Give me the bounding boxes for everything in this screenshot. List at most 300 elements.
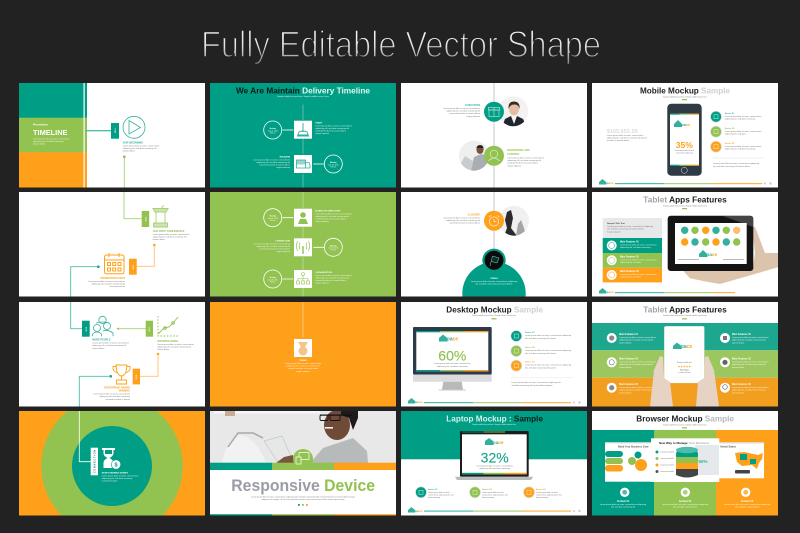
- text: our beginning: [123, 142, 160, 152]
- photo: chess: [499, 205, 529, 236]
- icon: growth chart: [158, 316, 178, 336]
- footer: lipace: [605, 181, 614, 185]
- subtitle: Sample subtitle text put here. Sample subtitle text put here: [663, 204, 707, 207]
- photo: woman: [500, 96, 528, 126]
- series list: Series 01: [525, 332, 535, 334]
- series row: consectetuer adipiscing elit, sed: [428, 494, 453, 496]
- series list: [710, 111, 762, 152]
- series row: consectetuer adipiscing elit, sed: [482, 494, 507, 496]
- icon box: connection: [294, 238, 312, 256]
- hand image: [683, 227, 780, 284]
- series row: Lorem ipsum dolor sit amet: [482, 491, 504, 494]
- text: release: [254, 156, 290, 168]
- right features: [720, 333, 769, 394]
- series list: Lorem ipsum dolor sit amet, consectetuer: [725, 130, 762, 133]
- text: our beginning: adipiscing elit, sed diam nonummy elit: [123, 147, 157, 150]
- icon box: start: [294, 121, 312, 139]
- vertical tag: CONNECTION: [94, 450, 96, 473]
- icon: podium: [153, 206, 168, 227]
- icon: calendar: [104, 253, 124, 274]
- series list: Series 01: [725, 113, 735, 115]
- date circle 2: [324, 238, 342, 256]
- text: closure: CLOSURE: [468, 213, 480, 216]
- series list: Series 03: [725, 143, 735, 145]
- content columns: elit, sed diam nonummy elit: [611, 506, 636, 509]
- note: Lorem ipsum dolor sit amet, consectetuer adipiscing: [713, 162, 759, 165]
- footer: [408, 398, 581, 404]
- text: board: adipiscing elit, sed diam nonummy elit: [315, 215, 349, 218]
- tablet mockup: Sample subtitle text: [677, 361, 692, 364]
- series list: Lorem ipsum dolor sit amet, consectetuer adipiscing: [525, 334, 571, 337]
- panel: laptop mockup: [401, 411, 587, 516]
- text: closure: adipiscing elit, sed diam nonummy elit: [446, 219, 480, 222]
- text: growing more: Lorem ipsum dolor sit amet, consectetuer: [157, 343, 194, 346]
- text: finish: euismod tincidunt ut laoreet dolore: [288, 367, 319, 370]
- series list: elit, sed diam nonummy elit laoreet: [525, 367, 556, 370]
- amount: [607, 129, 647, 142]
- footer: lipace: [414, 400, 423, 404]
- text: release: magna aliquam: [276, 167, 290, 169]
- feature card: adipiscing elit, sed diam: [620, 276, 642, 278]
- text: connection: adipiscing elit, sed diam nonummy elit: [256, 245, 290, 248]
- text: execution: [443, 104, 481, 118]
- connector green: [124, 192, 142, 219]
- text: our beginning: Lorem ipsum dolor sit amet, consectetuer: [123, 144, 160, 148]
- content columns: Lorem ipsum dolor sit amet, consectetuer adipiscing: [724, 503, 770, 506]
- series list: [511, 330, 571, 371]
- left features: adipiscing elit, sed diam nonummy elit: [619, 363, 653, 366]
- centre browser: Lorem ipsum dolor: [660, 457, 674, 460]
- amount: Lorem ipsum dolor sit amet, consectetuer: [607, 134, 644, 137]
- series row: [416, 487, 561, 499]
- text: start: [315, 122, 352, 135]
- heading: We Are Maintain Delivery Timeline: [236, 86, 370, 96]
- right features: Lorem ipsum dolor sit amet, consectetuer: [732, 360, 769, 364]
- series row: consectetuer adipiscing elit, sed: [536, 494, 561, 496]
- text: growing more: adipiscing elit, sed diam nonummy elit: [157, 346, 191, 349]
- text: more people: MORE PEOPLE: [92, 339, 111, 342]
- year tag: [142, 211, 149, 227]
- connector: [79, 411, 91, 462]
- date circle 2: [324, 155, 342, 173]
- text: more people: adipiscing elit, sed diam nonummy elit: [92, 344, 126, 347]
- bottom strip: [210, 514, 396, 516]
- heading: timeline: TIMELINE: [33, 128, 68, 137]
- centre browser: [651, 438, 719, 482]
- text: release: RELEASE: [280, 156, 291, 159]
- left browser: Build Your Business Gear: [618, 446, 649, 448]
- right browser: United States: [720, 446, 737, 448]
- right features: Lorem ipsum dolor sit amet, consectetuer: [732, 386, 769, 389]
- text: monitoring: magna aliquam: [507, 165, 521, 167]
- text: board: Lorem ipsum dolor sit amet, consectetuer: [315, 212, 352, 215]
- text: monitoring: adipiscing elit, sed diam nonummy elit: [507, 159, 541, 162]
- date circle 3: 9:00 am: [270, 281, 276, 283]
- dots: [682, 99, 687, 100]
- text: enterprise award: ENTERPRISE AWARD: [104, 386, 130, 389]
- finish flag node: [482, 249, 506, 272]
- colour blocks: [19, 83, 87, 188]
- subtitle: Sample subtitle text put here. Sample subtitle text put here: [472, 423, 516, 426]
- laptop mockup: adipiscing elit, sed diam nonummy: [479, 467, 510, 470]
- text: connection: [253, 240, 291, 253]
- date circle 1: June 21, 2015: [268, 218, 278, 220]
- left features: adipiscing elit, sed diam nonummy elit: [619, 339, 653, 342]
- footer: [599, 288, 735, 294]
- icon box: organization: [294, 270, 312, 288]
- text: promotion event: PROMOTION EVENT: [101, 277, 125, 280]
- left features: adipiscing elit, sed diam nonummy elit: [619, 389, 653, 392]
- centre browser: Lorem ipsum dolor: [660, 470, 674, 473]
- right features: laoreet dolore: [732, 391, 745, 394]
- text: monitoring: [507, 149, 544, 167]
- date circle 1: 9:00 am: [270, 220, 276, 222]
- icon box: medal: [294, 339, 312, 357]
- text: connection: Lorem ipsum dolor sit amet, consectetuer: [253, 242, 290, 245]
- heading: Tablet Apps Features: [643, 194, 727, 204]
- logo: lipace: [444, 336, 458, 342]
- right features: laoreet dolore: [732, 366, 745, 369]
- panel: more people: [19, 302, 205, 406]
- connector teal: [71, 302, 82, 329]
- spine: [302, 192, 304, 296]
- text: organization: [315, 271, 352, 285]
- text: finish: FINISH: [490, 278, 498, 280]
- tablet mockup: lipace: [704, 252, 717, 257]
- date circle 2: June 22, 2015: [328, 248, 338, 250]
- subtitle: Sample subtitle text put here. Sample subtitle text put here: [663, 423, 707, 426]
- text: connection: magna aliquam: [276, 251, 290, 253]
- feature card: Main Features 03: [620, 270, 639, 273]
- series list: Lorem ipsum dolor sit amet, consectetuer: [725, 115, 762, 118]
- connector orange: [140, 353, 159, 376]
- text: more people: Lorem ipsum dolor sit amet, consectetuer: [92, 342, 129, 345]
- text: our beginning: laoreet dolore: [123, 150, 136, 152]
- footer: [599, 179, 772, 185]
- centre browser: 50%: [698, 459, 708, 464]
- text: closure: euismod tincidunt ut laoreet dolore: [449, 222, 481, 225]
- heading: timeline: adipiscing elit, sed diam nonummy: [33, 140, 64, 143]
- text: promotion event: Lorem ipsum dolor sit amet, consectetuer: [88, 280, 125, 283]
- series row: Series 02: [482, 489, 492, 491]
- series row: Lorem ipsum dolor sit amet: [428, 491, 450, 494]
- amount: tincidunt ut laoreet dolore: [607, 139, 630, 142]
- text: start: euismod tincidunt ut laoreet dolore: [315, 130, 347, 133]
- text: execution: magna aliquam: [466, 116, 480, 118]
- text: start earning: adipiscing elit, sed diam nonummy: [102, 477, 132, 480]
- text: organization: Lorem ipsum dolor sit amet, consectetuer: [315, 274, 352, 277]
- left features: laoreet dolore: [619, 391, 632, 394]
- text: first conference: laoreet dolore: [153, 238, 166, 241]
- date circle 1: [264, 209, 282, 227]
- date circle 2: Monday: [330, 245, 337, 247]
- monitor mockup: adipiscing elit, sed diam nonummy: [437, 365, 468, 368]
- series row: diam nonummy: [536, 497, 548, 499]
- panel: delivery timeline: [210, 83, 396, 188]
- connector teal: [79, 375, 112, 406]
- feature card: Lorem ipsum dolor sit amet, consectetuer: [620, 243, 657, 246]
- panel: start earning money: [19, 395, 205, 533]
- text: execution: Lorem ipsum dolor sit amet, consectetuer: [443, 107, 480, 110]
- heading: Responsive Device: [231, 477, 375, 495]
- header band: [401, 411, 587, 459]
- series list: Lorem ipsum dolor sit amet, consectetuer adipiscing: [525, 364, 571, 367]
- phone mockup: [667, 104, 702, 176]
- text: board: euismod tincidunt ut laoreet dolore: [315, 218, 347, 221]
- text: start: START: [315, 122, 323, 125]
- text: enterprise award: euismod tincidunt ut laoreet: [106, 398, 130, 401]
- icon: play: [123, 116, 145, 138]
- heading: timeline: Promotion: [33, 122, 48, 126]
- feature card: Sample Title Text: [607, 222, 625, 225]
- title: Fully Editable Vector Shape: [201, 24, 601, 65]
- connector teal: [71, 265, 100, 296]
- icon: devices: [293, 449, 313, 469]
- text: start earning: Lorem ipsum dolor sit amet, consectetuer: [102, 474, 139, 477]
- series list: Lorem ipsum dolor sit amet, consectetuer adipiscing: [525, 349, 571, 352]
- percent: 32%: [481, 450, 509, 466]
- text: monitoring: MONITORING AND: [507, 149, 530, 152]
- panel: closure and finish: [401, 192, 587, 325]
- photo: man: [459, 140, 489, 171]
- right features: Main Features 05: [732, 358, 751, 360]
- date circle 1: 9:00 am: [270, 132, 276, 134]
- text: execution: EXECUTION: [465, 104, 480, 107]
- year tag: [111, 123, 119, 139]
- text: board: [315, 210, 352, 223]
- inner circle: [72, 426, 152, 506]
- panel: execution: [401, 83, 587, 188]
- connector orange: [137, 244, 156, 266]
- phone mockup: Lorem ipsum dolor sit amet: [675, 149, 694, 152]
- note: Lorem ipsum dolor sit amet, consectetuer adipiscing elit: [512, 381, 561, 384]
- series list: adipiscing elit, sed diam nonummy: [725, 148, 755, 151]
- text: first conference: Lorem ipsum dolor sit amet, consectetuer: [153, 233, 190, 236]
- text: start: adipiscing elit, sed diam nonummy elit: [315, 127, 349, 130]
- date circle 3: Sunday: [269, 277, 276, 279]
- date circle 2: Monday: [330, 162, 337, 164]
- text: enterprise award: [93, 386, 130, 401]
- text: connection: CONNECTION: [275, 240, 290, 242]
- tablet mockup: to make the best: [678, 371, 691, 374]
- right features: Main Features 04: [732, 333, 751, 336]
- series list: Series 03: [525, 362, 535, 364]
- note: sed diam nonummy elit laoreet dolore aliquam: [512, 384, 553, 387]
- text: start earning: START EARNING MONEY: [102, 471, 129, 474]
- year tag: [146, 321, 153, 337]
- text: finish: magna aliquam: [296, 371, 310, 373]
- text: start earning: euismod tincidunt: [102, 480, 118, 483]
- year tag: 2014: [144, 216, 147, 222]
- heading: timeline: laoreet dolore: [33, 142, 46, 146]
- date circle 2: 9:00 am: [330, 250, 337, 252]
- outer circle: [41, 395, 183, 533]
- text: more people: [92, 339, 129, 350]
- text: more people: laoreet dolore: [92, 347, 105, 350]
- series row: Series 01: [428, 489, 438, 491]
- right features: Lorem ipsum dolor sit amet, consectetuer: [732, 336, 769, 339]
- text: start: magna aliquam: [315, 133, 329, 135]
- laptop mockup: [455, 431, 533, 480]
- text: first conference: OUR FIRST CONFERENCE: [153, 230, 185, 233]
- left features: laoreet dolore: [619, 366, 632, 369]
- centre browser: Lorem ipsum dolor: [660, 464, 674, 466]
- text: promotion event: [88, 277, 125, 288]
- text: organization: ORGANIZATION: [315, 271, 332, 274]
- tablet mockup: [664, 326, 704, 383]
- colour columns: [592, 430, 778, 516]
- text: growing more: laoreet dolore: [157, 348, 170, 351]
- heading: timeline: [33, 122, 70, 146]
- panel: browser mockup: [592, 411, 778, 516]
- text: release: euismod tincidunt ut laoreet dolore: [259, 164, 291, 167]
- subtitle: aliquam erat volutpat. Ut wisi enim ad minim veniam, quis nostrud exerci tation ullamcorper suscipit: [262, 498, 345, 501]
- text: finish: adipiscing elit, sed diam nonummy elit: [286, 365, 320, 368]
- content columns: Content 03: [741, 500, 754, 503]
- year tag: 2016: [86, 326, 88, 332]
- date circle 2: June 22, 2015: [328, 164, 338, 166]
- series list: Lorem ipsum dolor sit amet, consectetuer: [725, 145, 762, 148]
- text: execution: adipiscing elit, sed diam nonummy elit: [446, 110, 480, 113]
- left features: Main Features 02: [619, 358, 639, 360]
- feature card: Main Features 01: [620, 240, 639, 244]
- text: monitoring: CONTROL: [507, 153, 520, 156]
- right features: adipiscing elit, sed diam nonummy elit: [732, 363, 766, 366]
- feature card: [603, 218, 662, 282]
- subtitle: [251, 496, 356, 501]
- monitor mockup: Lorem ipsum dolor sit amet, consectetuer: [434, 362, 471, 365]
- logo: lipace: [679, 122, 691, 127]
- year tag: [133, 369, 140, 384]
- arrow: to people: [116, 327, 146, 330]
- hands: [650, 356, 719, 406]
- subtitle: Sample subtitle text put here. Sample subtitle text put here: [277, 95, 330, 98]
- text: promotion event: adipiscing elit, sed diam nonummy elit: [91, 283, 125, 286]
- left features: Main Features 03: [619, 383, 639, 386]
- date circle 1: June 21, 2015: [268, 130, 278, 132]
- series row: Lorem ipsum dolor sit amet: [536, 491, 558, 494]
- right features: adipiscing elit, sed diam nonummy elit: [732, 339, 766, 342]
- note: [713, 162, 759, 168]
- icon: people: [92, 316, 113, 336]
- icon box: board: [294, 209, 312, 227]
- series list: Series 02: [725, 128, 735, 130]
- series row: diam nonummy: [482, 497, 494, 499]
- heading: Desktop Mockup Sample: [446, 304, 543, 314]
- heading: Mobile Mockup Sample: [640, 86, 730, 96]
- text: connection: euismod tincidunt ut laoreet dolore: [259, 248, 291, 251]
- content columns: Lorem ipsum dolor sit amet, consectetuer adipiscing: [600, 503, 646, 506]
- icon box: release: [294, 155, 312, 173]
- note: [512, 381, 561, 387]
- year tag: [129, 259, 137, 275]
- left features: [607, 333, 656, 394]
- feature card: Lorem ipsum dolor sit amet, consectetuer: [620, 258, 657, 261]
- text: promotion event: euismod tincidunt: [109, 285, 125, 288]
- feature card: elit, sed diam nonummy elit laoreet dolore: [607, 228, 645, 231]
- footer: [408, 507, 581, 513]
- series list: adipiscing elit, sed diam: [725, 133, 746, 136]
- heading: Tablet Apps Features: [643, 304, 727, 314]
- spine: [302, 302, 304, 337]
- connector green: [123, 155, 126, 188]
- text: finish: elit, sed diam nonummy elit laoreet dolore: [475, 283, 513, 286]
- left browser: [605, 442, 655, 482]
- text: growing more: [157, 340, 194, 351]
- content columns: elit, sed diam nonummy elit: [735, 506, 760, 509]
- left features: Main Features 01: [619, 333, 639, 336]
- text: enterprise award: adipiscing elit, sed diam nonummy: [99, 395, 130, 398]
- tablet mockup: [668, 216, 753, 271]
- panel: tablet apps features 1: [592, 192, 780, 296]
- content columns: Lorem ipsum dolor sit amet, consectetuer adipiscing: [662, 503, 708, 506]
- text: first conference: adipiscing elit, sed diam nonummy elit: [153, 236, 187, 239]
- text: first conference: [153, 230, 190, 241]
- text: release: Lorem ipsum dolor sit amet, consectetuer: [253, 158, 290, 161]
- percent: 60%: [438, 348, 466, 364]
- text: finish: [471, 278, 517, 286]
- panel: mobile mockup: [592, 83, 778, 188]
- photo: [210, 410, 396, 463]
- year tag: 2013: [115, 128, 117, 133]
- text: monitoring: Lorem ipsum dolor sit amet, consectetuer: [507, 156, 544, 159]
- tablet mockup: ★★★★★: [678, 364, 691, 368]
- feature card: Main Features 02: [620, 256, 639, 258]
- year tag: 2017: [149, 326, 151, 332]
- content columns: elit, sed diam nonummy elit: [673, 506, 698, 509]
- footer: lipace: [605, 290, 614, 294]
- date circle 3: [264, 270, 282, 288]
- text: finish: FINISH: [299, 360, 307, 362]
- feature card: adipiscing elit, sed diam: [620, 261, 642, 264]
- text: release: adipiscing elit, sed diam nonummy elit: [256, 161, 290, 164]
- series list: elit, sed diam nonummy elit laoreet: [525, 337, 556, 340]
- note: elit, sed diam nonummy elit laoreet dolore: [713, 165, 751, 168]
- text: enterprise award: Lorem ipsum dolor sit amet, consectetuer: [93, 393, 130, 396]
- monitor mockup: [413, 327, 492, 390]
- tablet mockup: Start Target: [680, 368, 689, 372]
- panel: finish orange: [210, 302, 396, 406]
- heading: Laptop Mockup : Sample: [446, 413, 543, 423]
- centre browser: New Way to Manage Your Business: [659, 441, 710, 445]
- right features: Main Features 06: [732, 383, 751, 386]
- text: organization: magna aliquam: [315, 283, 329, 285]
- dots: [298, 504, 308, 506]
- node: execution: [484, 102, 504, 122]
- amount: $165,655.00: [607, 129, 638, 135]
- series list: elit, sed diam nonummy elit laoreet: [525, 352, 556, 355]
- panel: first conference: [19, 192, 205, 296]
- text: enterprise award: WINNING: [119, 389, 130, 392]
- text: start: Lorem ipsum dolor sit amet, consectetuer: [315, 124, 352, 127]
- tablet mockup: lipace: [678, 344, 692, 350]
- phone mockup: consectetuer adipiscing: [676, 152, 693, 154]
- right browser: [718, 442, 764, 478]
- series row: Series 03: [536, 489, 546, 491]
- text: finish: [285, 360, 322, 373]
- text: finish: Lorem ipsum dolor sit amet, consectetuer: [285, 362, 322, 365]
- left features: Lorem ipsum dolor sit amet, consectetuer: [619, 360, 656, 364]
- text: finish: Lorem ipsum dolor sit amet, consectetuer adipiscing: [471, 280, 517, 283]
- colour bars: [210, 463, 396, 470]
- text: board: magna aliquam: [315, 221, 329, 223]
- subtitle: Sample subtitle text put here. Sample subtitle text put here: [663, 95, 707, 98]
- text: closure: Lorem ipsum dolor sit amet, consectetuer: [443, 216, 480, 219]
- subtitle: Lorem ipsum dolor sit amet, consectetuer adipiscing elit, sed diam nonummy nibh euismod tincidunt ut laoreet dolore magna: [251, 496, 356, 498]
- connector: [85, 130, 111, 132]
- series row: diam nonummy: [428, 497, 440, 499]
- text: monitoring: euismod tincidunt ut laoreet dolore: [507, 162, 539, 165]
